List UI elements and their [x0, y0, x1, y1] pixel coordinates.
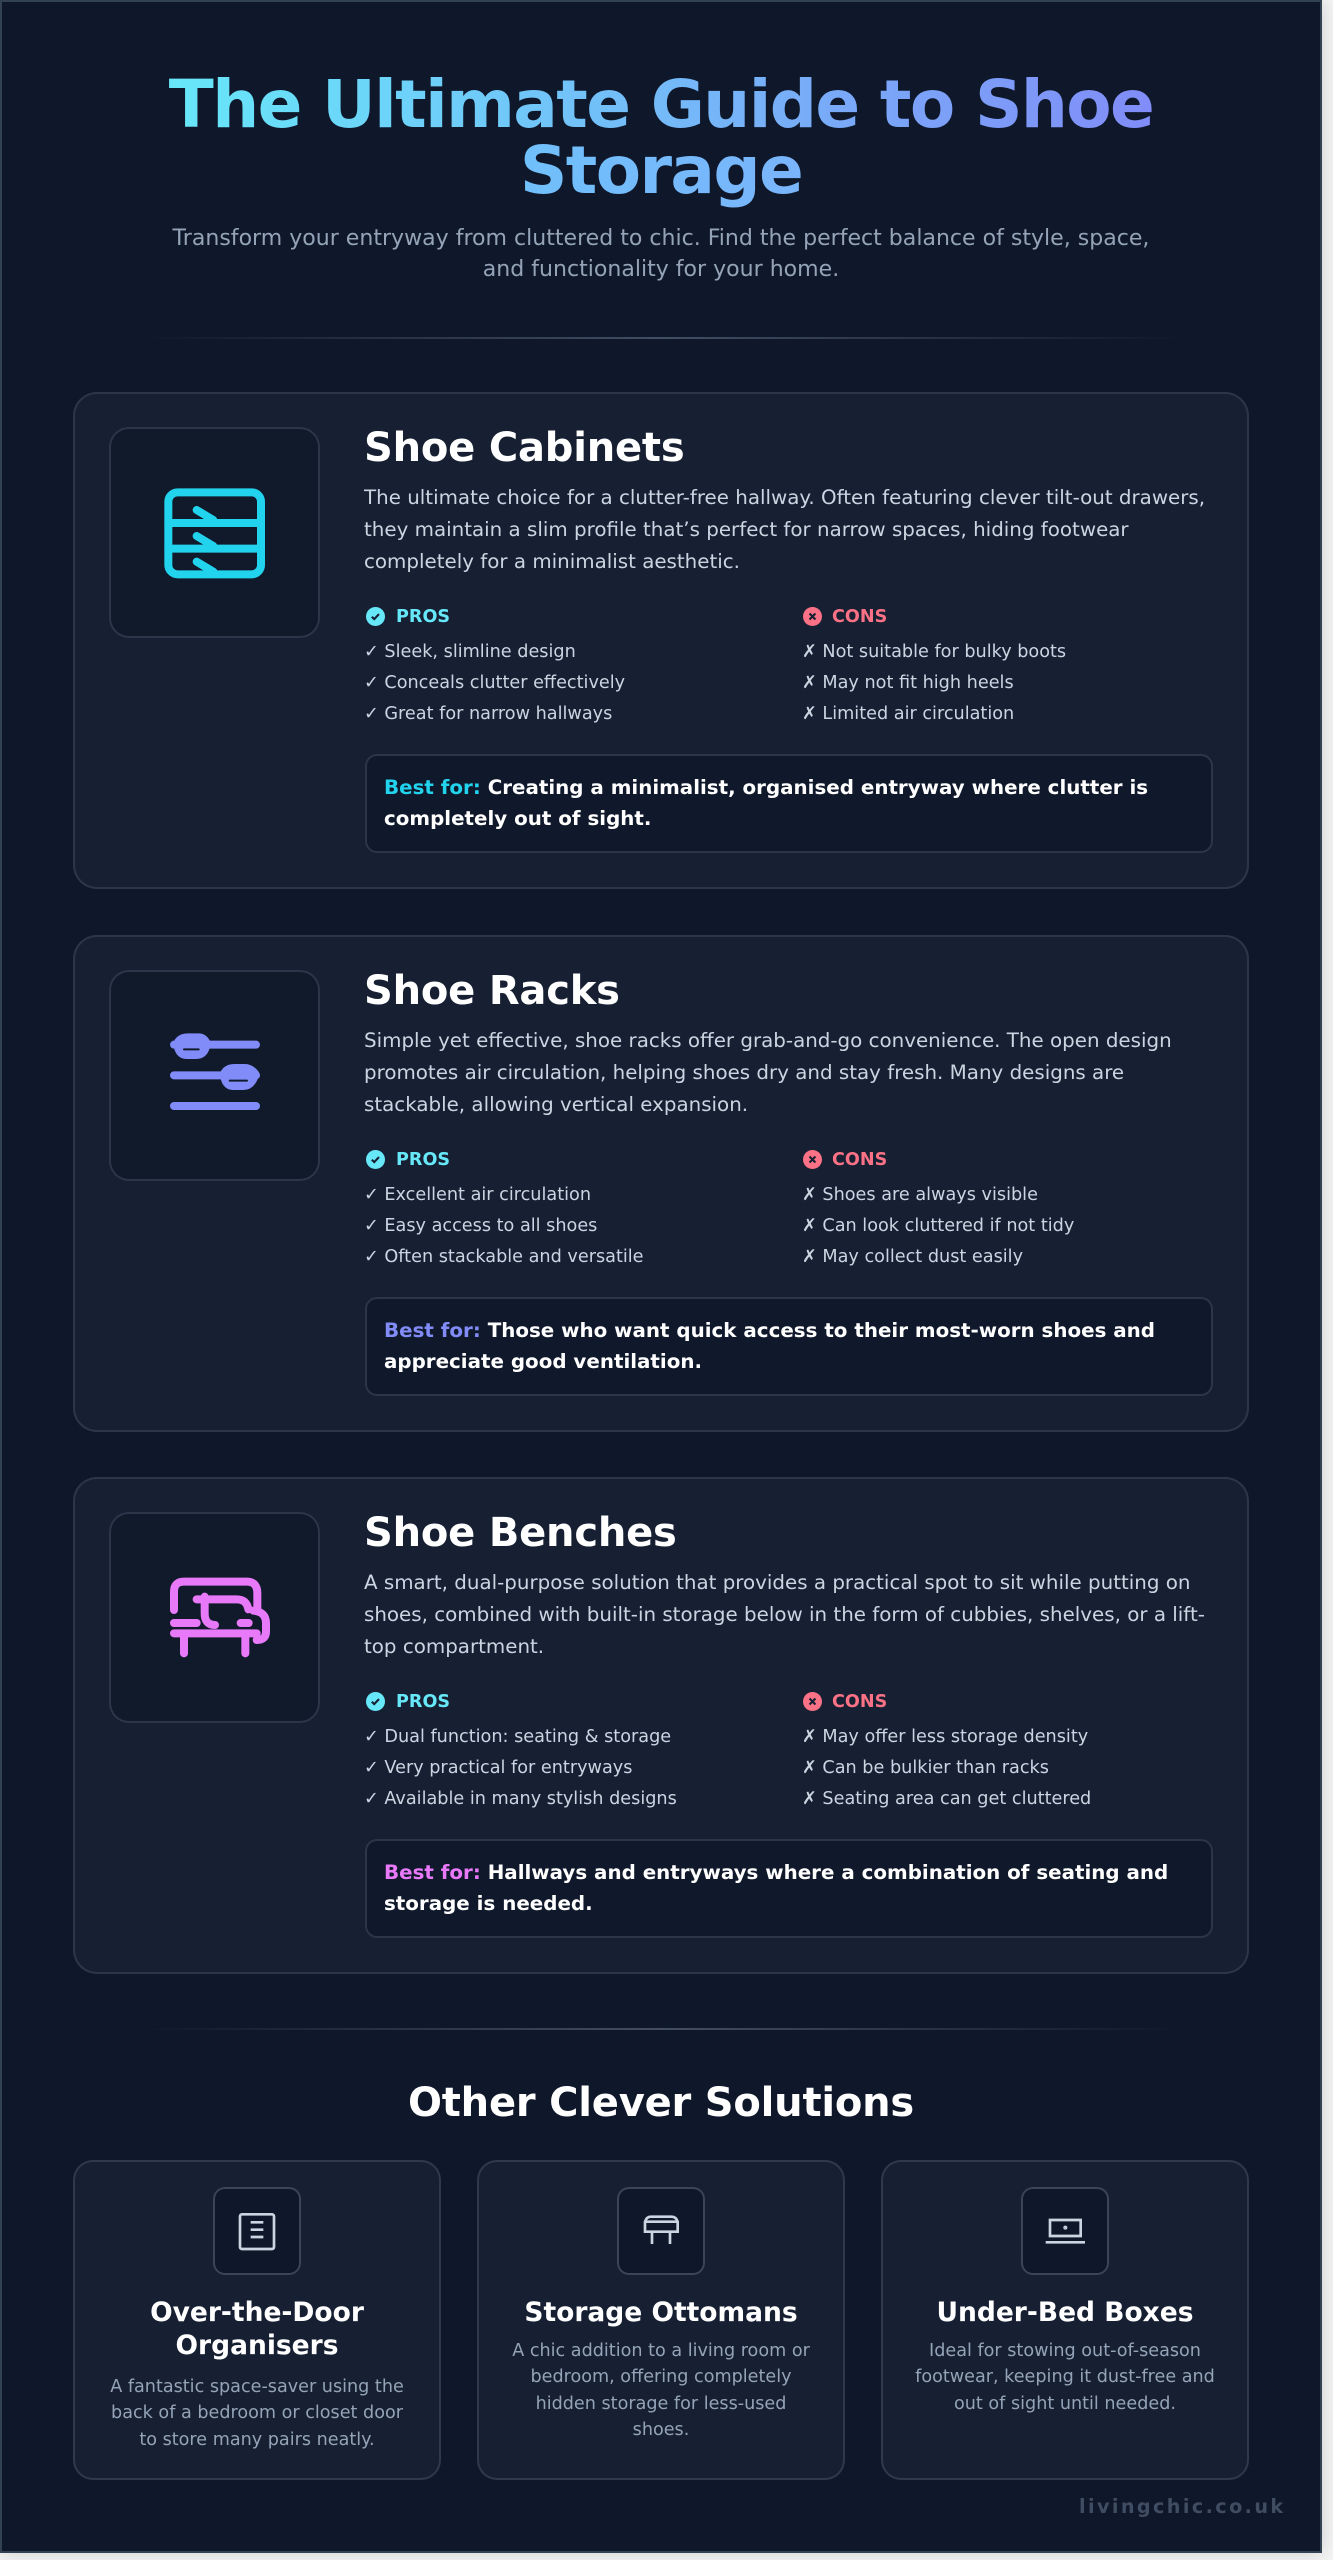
description: The ultimate choice for a clutter-free hallway. Often featuring clever tilt-out drawers, — [364, 486, 1205, 509]
subtitle — [172, 226, 1149, 282]
pros label — [366, 607, 450, 627]
cons list: ✗ Can be bulkier than racks — [802, 1758, 1049, 1778]
description — [364, 486, 1205, 573]
card title: Organisers — [176, 2330, 338, 2361]
pros list — [364, 1185, 644, 1267]
best for callout: Best for: Hallways and entryways where a combination of seating and — [384, 1861, 1168, 1884]
subtitle: and functionality for your home. — [483, 257, 839, 282]
description: promotes air circulation, helping shoes dry and stay fresh. Many designs are — [364, 1061, 1124, 1084]
icon: box — [1021, 2187, 1109, 2275]
description: top compartment. — [364, 1635, 544, 1658]
subtitle: Transform your entryway from cluttered to chic. Find the perfect balance of style, space, — [173, 226, 1149, 251]
panel: over-the-door organisers — [73, 2160, 441, 2480]
cons list — [802, 1727, 1091, 1809]
pros list: ✓ Great for narrow hallways — [364, 704, 612, 724]
description: shoes, combined with built-in storage below in the form of cubbies, shelves, or a lift- — [364, 1603, 1205, 1626]
pros label — [366, 1692, 450, 1712]
description: stackable, allowing vertical expansion. — [364, 1093, 748, 1116]
card title: Over-the-Door — [150, 2297, 364, 2328]
card text: out of sight until needed. — [954, 2394, 1176, 2414]
card title: Under-Bed Boxes — [936, 2297, 1194, 2328]
best for callout: completely out of sight. — [384, 807, 651, 830]
pros — [364, 607, 625, 724]
icon: rack — [109, 970, 320, 1181]
card text: Ideal for stowing out-of-season — [929, 2341, 1201, 2361]
cons label: CONS — [832, 1150, 887, 1170]
watermark: livingchic.co.uk — [1079, 2495, 1286, 2518]
panel: shoe racks — [73, 935, 1249, 1432]
cons label — [803, 1692, 887, 1712]
cons list: ✗ May offer less storage density — [802, 1727, 1088, 1747]
pros list: ✓ Conceals clutter effectively — [364, 673, 625, 693]
description — [364, 1029, 1172, 1116]
icon: cabinet — [109, 427, 320, 638]
cons list: ✗ Not suitable for bulky boots — [802, 642, 1066, 662]
title — [169, 66, 1153, 209]
panel: shoe cabinets — [73, 392, 1249, 889]
cons — [802, 1150, 1074, 1267]
icon: organiser — [213, 2187, 301, 2275]
card text: shoes. — [633, 2420, 689, 2440]
card text: footwear, keeping it dust-free and — [915, 2367, 1215, 2387]
cons list — [802, 1185, 1074, 1267]
pros list: ✓ Very practical for entryways — [364, 1758, 632, 1778]
best for callout — [365, 1297, 1213, 1396]
pros list — [364, 1727, 677, 1809]
cons list — [802, 642, 1066, 724]
cons — [802, 607, 1066, 724]
best for callout: Best for: Creating a minimalist, organised entryway where clutter is — [384, 776, 1148, 799]
best for callout — [365, 754, 1213, 853]
pros list: ✓ Easy access to all shoes — [364, 1216, 597, 1236]
pros label: PROS — [396, 1150, 450, 1170]
pros — [364, 1692, 677, 1809]
heading: Shoe Cabinets — [364, 425, 684, 471]
cons label: CONS — [832, 1692, 887, 1712]
cons list: ✗ May not fit high heels — [802, 673, 1014, 693]
pros list: ✓ Often stackable and versatile — [364, 1247, 644, 1267]
best for callout — [365, 1839, 1213, 1938]
panel: shoe benches — [73, 1477, 1249, 1974]
heading: Shoe Racks — [364, 968, 620, 1014]
card text — [110, 2377, 404, 2450]
heading: Shoe Benches — [364, 1510, 677, 1556]
cons list: ✗ Seating area can get cluttered — [802, 1789, 1091, 1809]
cons label — [803, 607, 887, 627]
icon: bench — [109, 1512, 320, 1723]
pros list: ✓ Available in many stylish designs — [364, 1789, 677, 1809]
pros label — [366, 1150, 450, 1170]
card text: back of a bedroom or closet door — [111, 2403, 403, 2423]
description: A smart, dual-purpose solution that provides a practical spot to sit while putting on — [364, 1571, 1190, 1594]
card text: bedroom, offering completely — [530, 2367, 792, 2387]
description: they maintain a slim profile that’s perfect for narrow spaces, hiding footwear — [364, 518, 1129, 541]
pros list: ✓ Excellent air circulation — [364, 1185, 591, 1205]
pros label: PROS — [396, 607, 450, 627]
cons label — [803, 1150, 887, 1170]
best for callout: appreciate good ventilation. — [384, 1350, 702, 1373]
best for callout: storage is needed. — [384, 1892, 593, 1915]
card text: A chic addition to a living room or — [512, 2341, 810, 2361]
section heading: Other Clever Solutions — [408, 2080, 914, 2126]
card text — [512, 2341, 810, 2440]
pros — [364, 1150, 644, 1267]
pros list: ✓ Sleek, slimline design — [364, 642, 576, 662]
card text: A fantastic space-saver using the — [110, 2377, 404, 2397]
cons label: CONS — [832, 607, 887, 627]
description: Simple yet effective, shoe racks offer grab-and-go convenience. The open design — [364, 1029, 1172, 1052]
title: Storage — [520, 132, 802, 209]
cons list: ✗ Limited air circulation — [802, 704, 1014, 724]
pros label: PROS — [396, 1692, 450, 1712]
panel: under-bed boxes — [881, 2160, 1249, 2480]
cons — [802, 1692, 1091, 1809]
pros list: ✓ Dual function: seating & storage — [364, 1727, 671, 1747]
card text: to store many pairs neatly. — [139, 2430, 375, 2450]
cons list: ✗ Shoes are always visible — [802, 1185, 1038, 1205]
best for callout: Best for: Those who want quick access to their most-worn shoes and — [384, 1319, 1155, 1342]
card title — [150, 2297, 364, 2361]
pros list — [364, 642, 625, 724]
cons list: ✗ May collect dust easily — [802, 1247, 1023, 1267]
card text: hidden storage for less-used — [536, 2394, 786, 2414]
icon: ottoman — [617, 2187, 705, 2275]
description — [364, 1571, 1205, 1658]
cons list: ✗ Can look cluttered if not tidy — [802, 1216, 1074, 1236]
panel: storage ottomans — [477, 2160, 845, 2480]
card title: Storage Ottomans — [524, 2297, 798, 2328]
card text — [915, 2341, 1215, 2414]
description: completely for a minimalist aesthetic. — [364, 550, 740, 573]
title: The Ultimate Guide to Shoe — [169, 66, 1153, 143]
